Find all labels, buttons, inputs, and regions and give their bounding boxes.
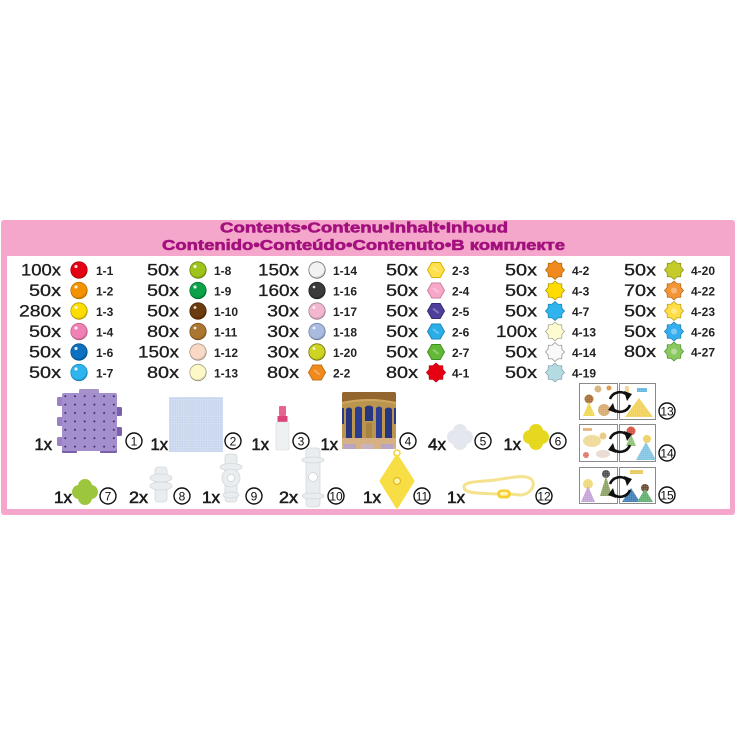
item 1-1: 1-1 [96, 264, 114, 278]
item 1-4: 50x [29, 323, 62, 341]
item 4-23 [624, 302, 715, 320]
item 6: yellow peg: 6 [555, 434, 562, 448]
item 5: white pegs [428, 424, 491, 454]
item 1-11: 80x [147, 323, 180, 341]
item 4-19 [505, 363, 596, 382]
item 1-8: 50x [147, 262, 180, 280]
item 1-18: 30x [267, 323, 300, 341]
item 5: white pegs: 4x [428, 436, 447, 454]
item 2-7: 2-7 [452, 346, 470, 360]
item 1-6: 50x [29, 344, 62, 362]
item 1-20: 30x [267, 344, 300, 362]
item 4-23: 50x [624, 302, 657, 320]
item 4-20 [624, 260, 715, 280]
item 2-2: 2-2 [333, 366, 351, 380]
item 9: clear connector with hole: 9 [251, 489, 258, 503]
item 1-6 [29, 344, 114, 362]
item 4-13: 4-13 [572, 326, 596, 340]
item 4-26: 50x [624, 323, 657, 341]
item 4-7: 50x [505, 302, 538, 320]
item 1-18: 1-18 [333, 326, 357, 340]
item 1-13 [147, 364, 238, 382]
title: multilingual heading: Contents•Contenu•Inhalt•Inhoud [220, 220, 508, 236]
bead list column 6 [624, 260, 715, 361]
item 4-13: 100x [496, 323, 538, 341]
title: multilingual heading: Contenido•Conteúdo•Contenuto•В комплекте [162, 237, 565, 254]
item 7: green peg: 7 [105, 489, 112, 503]
item 2-3: 2-3 [452, 264, 470, 278]
bead list column 3 [258, 262, 357, 382]
item 2-4 [386, 282, 470, 300]
item 1-3: 280x [19, 302, 62, 320]
item 4-20: 4-20 [691, 264, 715, 278]
item 2-5: 50x [386, 302, 419, 320]
item 10: long clear connector: 2x [279, 489, 299, 507]
item 4-19: 4-19 [572, 366, 596, 380]
item 3: spray bottle: 3 [298, 434, 305, 448]
item 4-27: 80x [624, 343, 657, 361]
title: multilingual heading [162, 220, 565, 254]
item 1-1: 100x [21, 262, 62, 280]
item 12: bead chain with clip: 12 [537, 489, 551, 503]
item 4-2: 4-2 [572, 264, 590, 278]
item 2-2 [267, 364, 351, 382]
item 14: design sheet pair: 14 [660, 446, 674, 460]
item 4-26 [624, 322, 715, 341]
item 1-6: 1-6 [96, 346, 114, 360]
bead list column 2 [138, 262, 238, 382]
item 1-8: 1-8 [214, 264, 232, 278]
item 2-5: 2-5 [452, 305, 470, 319]
item 1-14 [258, 262, 357, 280]
item 2-6: 50x [386, 323, 419, 341]
item 2: pegboard sheet [150, 397, 241, 454]
item 4-27 [624, 342, 715, 361]
item 8: small clear connector: 2x [129, 489, 149, 507]
item 1-18 [267, 323, 357, 341]
item 4-22 [624, 281, 715, 300]
item 4-3 [505, 281, 590, 300]
item 2-2: 80x [267, 364, 300, 382]
item 2-5 [386, 302, 470, 320]
item 4: palace backdrop picture: 4 [405, 434, 412, 448]
item 4-20: 50x [624, 262, 657, 280]
item 15: design sheet pair [580, 468, 675, 504]
item 4-2 [505, 260, 590, 280]
item 2-3 [386, 262, 470, 280]
item 1-20 [267, 344, 357, 362]
item 3: spray bottle: 1x [252, 436, 270, 454]
item 1-8 [147, 262, 232, 280]
item 1-12 [138, 344, 238, 362]
item 13: design sheet pair [580, 384, 675, 420]
item 4-1: 4-1 [452, 366, 470, 380]
item 4-14: 4-14 [572, 346, 596, 360]
item 1-2: 50x [29, 282, 62, 300]
item 11: yellow diamond stand: 1x [363, 489, 382, 507]
item 4-1 [386, 363, 470, 382]
item 9: clear connector with hole: 1x [202, 489, 221, 507]
bead list column 5 [496, 260, 596, 382]
item 1-4 [29, 323, 114, 341]
bead list column 1 [19, 262, 114, 382]
item 1-7 [29, 364, 114, 382]
item 1-13: 80x [147, 364, 180, 382]
item 4-22: 70x [624, 282, 657, 300]
item 4-23: 4-23 [691, 305, 715, 319]
bead list column 4 [386, 262, 470, 382]
item 1-16: 160x [258, 282, 300, 300]
item 1-7: 50x [29, 364, 62, 382]
item 11: yellow diamond stand [363, 450, 430, 507]
item 1-20: 1-20 [333, 346, 357, 360]
item 1-17: 1-17 [333, 305, 357, 319]
item 8: small clear connector: 8 [179, 489, 186, 503]
item 1-17 [267, 302, 357, 320]
item 5: white pegs: 5 [480, 434, 487, 448]
item 4-22: 4-22 [691, 284, 715, 298]
item 10: long clear connector [279, 448, 344, 507]
item 1-4: 1-4 [96, 326, 114, 340]
item 4-3: 4-3 [572, 284, 590, 298]
item 1-11 [147, 323, 238, 341]
item 8: small clear connector [129, 467, 190, 507]
item 2: pegboard sheet: 1x [150, 436, 169, 454]
item 4-14 [505, 342, 596, 362]
item 12: bead chain with clip [447, 477, 552, 507]
item 4-26: 4-26 [691, 326, 715, 340]
item 1-3 [19, 302, 114, 320]
item 2-7 [386, 344, 470, 362]
item 4-7 [505, 302, 590, 320]
item 1-3: 1-3 [96, 305, 114, 319]
item 2-3: 50x [386, 262, 419, 280]
item 1-2 [29, 282, 114, 300]
item 1-10 [147, 302, 238, 320]
item 4-7: 4-7 [572, 305, 590, 319]
item 2-4: 50x [386, 282, 419, 300]
item 2-7: 50x [386, 344, 419, 362]
item 1-12: 150x [138, 344, 180, 362]
item 1-11: 1-11 [214, 326, 238, 340]
item 7: green peg: 1x [54, 489, 73, 507]
item 1: purple bead tray: 1 [131, 434, 138, 448]
item 4-3: 50x [505, 282, 538, 300]
item 4-27: 4-27 [691, 346, 715, 360]
item 13: design sheet pair: 13 [660, 404, 674, 418]
item 10: long clear connector: 10 [329, 489, 343, 503]
item 9: clear connector with hole [202, 454, 262, 507]
item 1-13: 1-13 [214, 366, 238, 380]
item 1-14: 150x [258, 262, 300, 280]
item 1-14: 1-14 [333, 264, 357, 278]
item 12: bead chain with clip: 1x [447, 489, 466, 507]
item 4: palace backdrop picture: 1x [320, 436, 339, 454]
item 1-10: 50x [147, 302, 180, 320]
item 4-1: 80x [386, 364, 419, 382]
item 1-16 [258, 282, 357, 300]
panel: contents frame [1, 220, 735, 515]
item 6: yellow peg [504, 424, 566, 454]
item 2: pegboard sheet: 2 [230, 434, 237, 448]
item 7: green peg [54, 479, 116, 507]
item 1: purple bead tray: 1x [34, 436, 53, 454]
item 4-19: 50x [505, 364, 538, 382]
item 2-6 [386, 323, 470, 341]
item 3: spray bottle [252, 406, 309, 454]
item 4-13 [496, 322, 596, 341]
item 1-2: 1-2 [96, 284, 114, 298]
item 11: yellow diamond stand: 11 [416, 489, 429, 503]
item 2-4: 2-4 [452, 284, 470, 298]
item 14: design sheet pair [580, 424, 675, 462]
item 4-2: 50x [505, 262, 538, 280]
item 6: yellow peg: 1x [504, 436, 522, 454]
item 1-16: 1-16 [333, 284, 357, 298]
item 15: design sheet pair: 15 [660, 488, 674, 502]
item 1-1 [21, 262, 114, 280]
item 4: palace backdrop picture [320, 392, 416, 454]
item 4-14: 50x [505, 344, 538, 362]
item 1-9: 50x [147, 282, 180, 300]
item 1-9 [147, 282, 232, 300]
item 1: purple bead tray [34, 389, 142, 454]
item 1-17: 30x [267, 302, 300, 320]
item 2-6: 2-6 [452, 326, 470, 340]
item 1-10: 1-10 [214, 305, 238, 319]
item 1-12: 1-12 [214, 346, 238, 360]
item 1-9: 1-9 [214, 284, 232, 298]
item 1-7: 1-7 [96, 366, 114, 380]
